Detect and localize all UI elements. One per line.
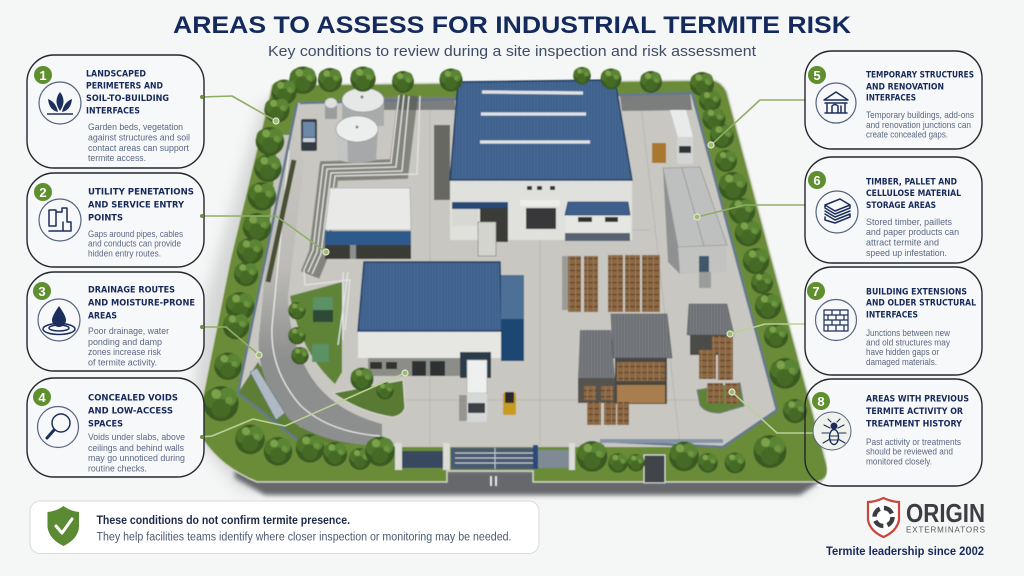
boundary gate xyxy=(395,441,723,483)
callout headline: These conditions do not confirm termite presence. xyxy=(96,515,350,527)
body 8: should be reviewed and xyxy=(866,446,953,456)
body 6: attract termite and xyxy=(866,238,939,248)
subtitle: Key conditions to review during a site inspection and risk assessment xyxy=(268,43,757,60)
body 5: Temporary buildings, add-ons xyxy=(866,110,974,120)
heading 4 xyxy=(88,394,178,430)
body 3 xyxy=(88,326,169,368)
trees along the perimeter xyxy=(203,66,807,473)
heading 8 xyxy=(866,394,969,430)
callout text: They help facilities teams identify where closer inspection or monitoring may be needed. xyxy=(96,532,512,544)
heading 2: UTILITY PENETATIONS xyxy=(88,188,194,198)
heading 2: AND SERVICE ENTRY xyxy=(88,200,184,210)
parked silver bus xyxy=(250,368,285,420)
heading 2 xyxy=(88,188,194,224)
heading 1: SOIL-TO-BUILDING xyxy=(86,94,169,104)
number badge 2: 2 xyxy=(39,185,47,200)
body 3: ponding and damp xyxy=(88,337,162,347)
icon: logo shield xyxy=(868,498,899,537)
leader line 7 xyxy=(727,324,808,337)
panel 8: previous termite activity xyxy=(805,379,982,486)
heading 4: CONCEALED VOIDS xyxy=(88,394,178,404)
leader line 8 xyxy=(729,389,815,433)
number badge 8 xyxy=(812,392,830,410)
icon: termite xyxy=(813,412,851,450)
icon: plant xyxy=(39,82,81,124)
body 7: Junctions between new xyxy=(866,328,950,338)
body 6 xyxy=(866,217,959,258)
number badge 2 xyxy=(34,183,52,201)
number badge 8: 8 xyxy=(817,394,825,409)
logo subtitle: EXTERMINATORS xyxy=(906,526,985,534)
heading 6: TIMBER, PALLET AND xyxy=(866,178,957,188)
icon: water drop xyxy=(38,299,80,341)
panel 2: utility penetrations xyxy=(27,173,204,267)
body 1: against structures and soil xyxy=(88,132,190,142)
heading 1: INTERFACES xyxy=(86,106,140,116)
dock recess xyxy=(480,208,508,242)
green transformer pad xyxy=(312,344,329,362)
heading 6: STORAGE AREAS xyxy=(866,201,936,211)
tagline: Termite leadership since 2002 xyxy=(826,544,984,558)
number badge 5 xyxy=(808,66,826,84)
number badge 7 xyxy=(807,282,825,300)
number badge 1 xyxy=(34,66,52,84)
body 4: ceilings and behind walls xyxy=(88,443,184,453)
loading canopy xyxy=(452,202,508,209)
body 8: monitored closely. xyxy=(866,456,932,466)
icon: magnifier xyxy=(38,406,78,448)
body 7: and old structures may xyxy=(866,338,950,348)
leader line 3 xyxy=(201,327,262,358)
title: AREAS TO ASSESS FOR INDUSTRIAL TERMITE RISK xyxy=(173,12,851,39)
planted utility island xyxy=(290,282,342,384)
number badge 6 xyxy=(808,171,826,189)
pipework xyxy=(304,95,420,345)
top access lane xyxy=(383,93,692,111)
number badge 7: 7 xyxy=(812,284,820,299)
body 5: and renovation junctions can xyxy=(866,120,971,130)
number badge 3: 3 xyxy=(38,284,46,299)
logo: Origin Exterminators xyxy=(868,498,985,537)
lawn xyxy=(200,80,828,482)
heading 6: CELLULOSE MATERIAL xyxy=(866,189,961,199)
lower warehouse xyxy=(358,262,524,378)
number badge 1: 1 xyxy=(39,68,47,83)
body 2 xyxy=(88,229,183,258)
body 1: Garden beds, vegetation xyxy=(88,122,183,132)
panel 7: building extensions xyxy=(805,267,982,375)
heading 1: PERIMETERS AND xyxy=(86,82,163,92)
wall windows xyxy=(527,186,532,190)
panel 3: drainage routes xyxy=(27,272,204,371)
body 2: and conducts can provide xyxy=(88,238,181,248)
annex xyxy=(565,215,630,233)
strip of lawn along lower-left fence xyxy=(238,362,368,445)
icon: brick wall xyxy=(816,300,856,340)
body 1 xyxy=(88,122,190,163)
silo tank front xyxy=(336,116,378,163)
internal road xyxy=(259,135,382,445)
body 4: Voids under slabs, above xyxy=(88,432,185,442)
panel 6: timber storage xyxy=(805,157,982,263)
body 8: Past activity or treatments xyxy=(866,437,961,447)
leader line 4 xyxy=(201,370,408,437)
heading 5: INTERFACES xyxy=(866,94,916,104)
panel 8 fill beside the lawn xyxy=(815,379,982,486)
body 3: zones increase risk xyxy=(88,347,161,357)
heading 3: AREAS xyxy=(88,312,117,322)
body 3: Poor drainage, water xyxy=(88,326,169,336)
heading 3: AND MOISTURE-PRONE xyxy=(88,298,195,308)
heading 6 xyxy=(866,178,961,211)
hedge strip between fence and road xyxy=(268,160,294,282)
icon: stacked timber xyxy=(816,191,858,233)
concrete yard xyxy=(238,93,777,447)
icon: pipes xyxy=(39,199,81,241)
body 1: termite access. xyxy=(88,153,146,163)
heading 8: AREAS WITH PREVIOUS xyxy=(866,394,969,404)
perimeter road xyxy=(235,470,822,495)
small storage shed xyxy=(687,304,734,355)
leader line 1 xyxy=(201,96,279,124)
body 7: have hidden gaps or xyxy=(866,347,939,357)
heading 4: AND LOW-ACCESS xyxy=(88,406,173,416)
body 4: may go unnoticed during xyxy=(88,453,185,463)
timber pallet stacks xyxy=(562,255,660,312)
yard forklift xyxy=(652,143,666,163)
heading 1 xyxy=(86,70,169,116)
icon: green shield with check xyxy=(48,506,79,546)
heading 3 xyxy=(88,286,195,322)
open storage shed xyxy=(578,314,672,404)
leader line 5 xyxy=(708,100,805,148)
body 5 xyxy=(866,110,974,140)
rooftop unit xyxy=(478,222,496,256)
pallets by small shed xyxy=(697,350,744,413)
callout: disclaimer xyxy=(30,501,539,554)
pipe rack base xyxy=(310,95,408,275)
main warehouse xyxy=(450,80,632,256)
panel 8 outline xyxy=(805,379,982,486)
heading 5: AND RENOVATION xyxy=(866,82,944,92)
planted bed in front of lower warehouse xyxy=(333,380,405,417)
heading 5 xyxy=(866,70,974,104)
site ground shadow xyxy=(190,100,820,490)
heading 8: TREATMENT HISTORY xyxy=(866,420,962,430)
heading 7: AND OLDER STRUCTURAL xyxy=(866,298,976,308)
yard truck xyxy=(670,110,693,164)
panel 5: temporary structures xyxy=(805,51,982,149)
body 6: Stored timber, paillets xyxy=(866,217,952,227)
number badge 6: 6 xyxy=(813,173,821,188)
heading 2: POINTS xyxy=(88,214,123,224)
body 6: and paper products can xyxy=(866,227,959,237)
forklift xyxy=(503,392,516,415)
body 5: create concealed gaps. xyxy=(866,130,948,140)
aerial view of the industrial site xyxy=(190,66,828,495)
icon: building xyxy=(816,83,856,123)
delivery truck xyxy=(459,360,487,422)
logo wordmark: ORIGIN xyxy=(906,498,985,528)
panel 1: landscaped perimeters xyxy=(27,55,204,168)
heading 7: INTERFACES xyxy=(866,310,918,320)
green transformer top xyxy=(313,297,333,310)
roof skylights xyxy=(480,92,590,142)
small tank xyxy=(325,98,337,119)
body 8 xyxy=(866,437,961,466)
number badge 4 xyxy=(33,388,51,406)
body 4 xyxy=(88,432,185,474)
white-roofed utility building xyxy=(325,188,411,259)
parked van xyxy=(301,119,317,151)
body 3: of termite activity. xyxy=(88,358,157,368)
heading 4: SPACES xyxy=(88,420,123,430)
body 6: speed up infestation. xyxy=(866,248,947,258)
number badge 3 xyxy=(33,282,51,300)
front pallets xyxy=(587,402,629,425)
heading 7: BUILDING EXTENSIONS xyxy=(866,288,967,298)
silo tank rear xyxy=(342,88,384,126)
body 4: routine checks. xyxy=(88,464,147,474)
body 2: hidden entry routes. xyxy=(88,248,161,258)
number badge 4: 4 xyxy=(38,390,46,405)
heading 8: TERMITE ACTIVITY OR xyxy=(866,407,963,417)
grey prefabricated building xyxy=(663,167,727,288)
perimeter fence xyxy=(238,93,777,447)
leader line 6 xyxy=(694,205,805,220)
body 7 xyxy=(866,328,950,367)
body 2: Gaps around pipes, cables xyxy=(88,229,183,239)
panel 4: concealed voids xyxy=(27,378,204,477)
body 7: damaged materials. xyxy=(866,357,937,367)
body 1: contact areas can support xyxy=(88,143,189,153)
heading 5: TEMPORARY STRUCTURES xyxy=(866,70,974,80)
heading 1: LANDSCAPED xyxy=(86,70,146,80)
leader line 2 xyxy=(201,216,329,255)
number badge 5: 5 xyxy=(813,68,821,83)
yard joints xyxy=(400,97,740,445)
road centre line xyxy=(272,150,380,436)
heading 3: DRAINAGE ROUTES xyxy=(88,286,175,296)
heading 7 xyxy=(866,288,976,320)
